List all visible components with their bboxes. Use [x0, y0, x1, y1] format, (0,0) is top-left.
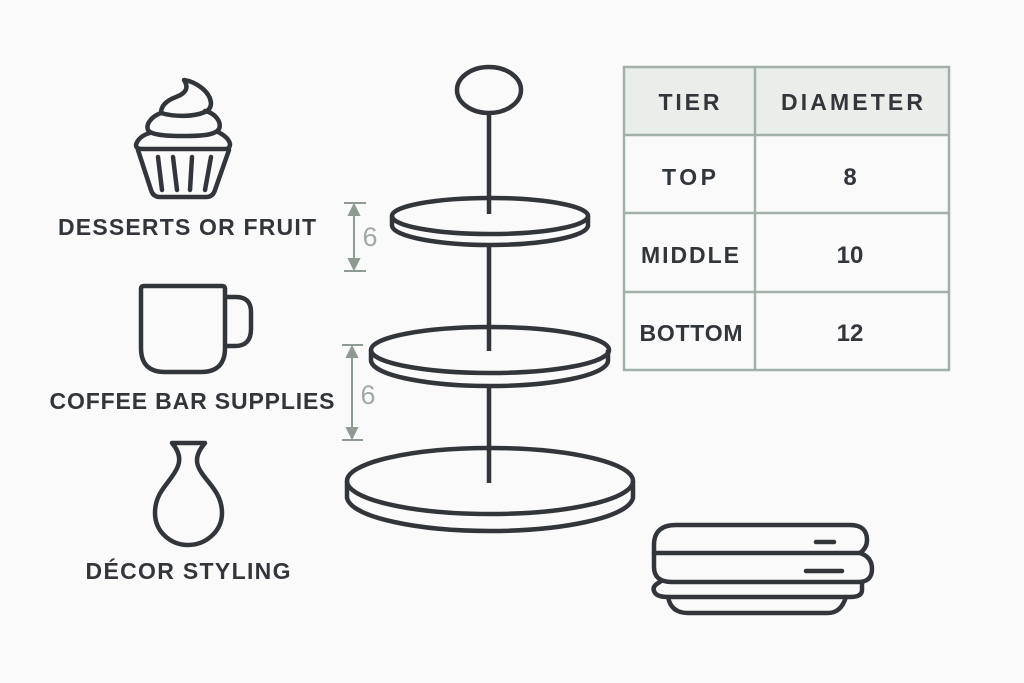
row: middle: MIDDLE	[641, 242, 739, 268]
dimension: lower spacing 6	[342, 345, 376, 440]
icon: stack of folded napkins	[654, 525, 872, 613]
label: desserts or fruit: DESSERTS OR FRUIT	[58, 214, 316, 240]
table: tier diameters	[624, 67, 949, 370]
top rod	[487, 113, 491, 214]
dimension: upper spacing 6	[344, 203, 378, 271]
row: bottom: BOTTOM	[640, 320, 742, 346]
label: decor styling: DÉCOR STYLING	[86, 557, 290, 584]
icon: cupcake	[136, 80, 230, 197]
dimension: upper spacing 6: 6	[362, 222, 378, 252]
top tier	[392, 198, 588, 245]
label: coffee bar supplies: COFFEE BAR SUPPLIES	[50, 388, 334, 414]
illustration: three-tier stand	[347, 67, 633, 531]
header: diameter: DIAMETER	[781, 89, 923, 115]
middle rod	[487, 247, 491, 351]
bottom rod	[487, 387, 491, 483]
middle tier	[371, 327, 609, 386]
dimension: lower spacing 6: 6	[360, 380, 376, 410]
icon: mug	[141, 286, 251, 372]
value: bottom 12: 12	[837, 320, 863, 347]
row: top: TOP	[662, 164, 716, 190]
bottom tier	[347, 448, 633, 531]
icon: vase	[155, 443, 222, 545]
table header background	[624, 67, 949, 135]
value: top 8: 8	[843, 164, 857, 191]
finial knob	[457, 67, 521, 113]
value: middle 10: 10	[837, 242, 863, 269]
header: tier: TIER	[658, 89, 720, 115]
